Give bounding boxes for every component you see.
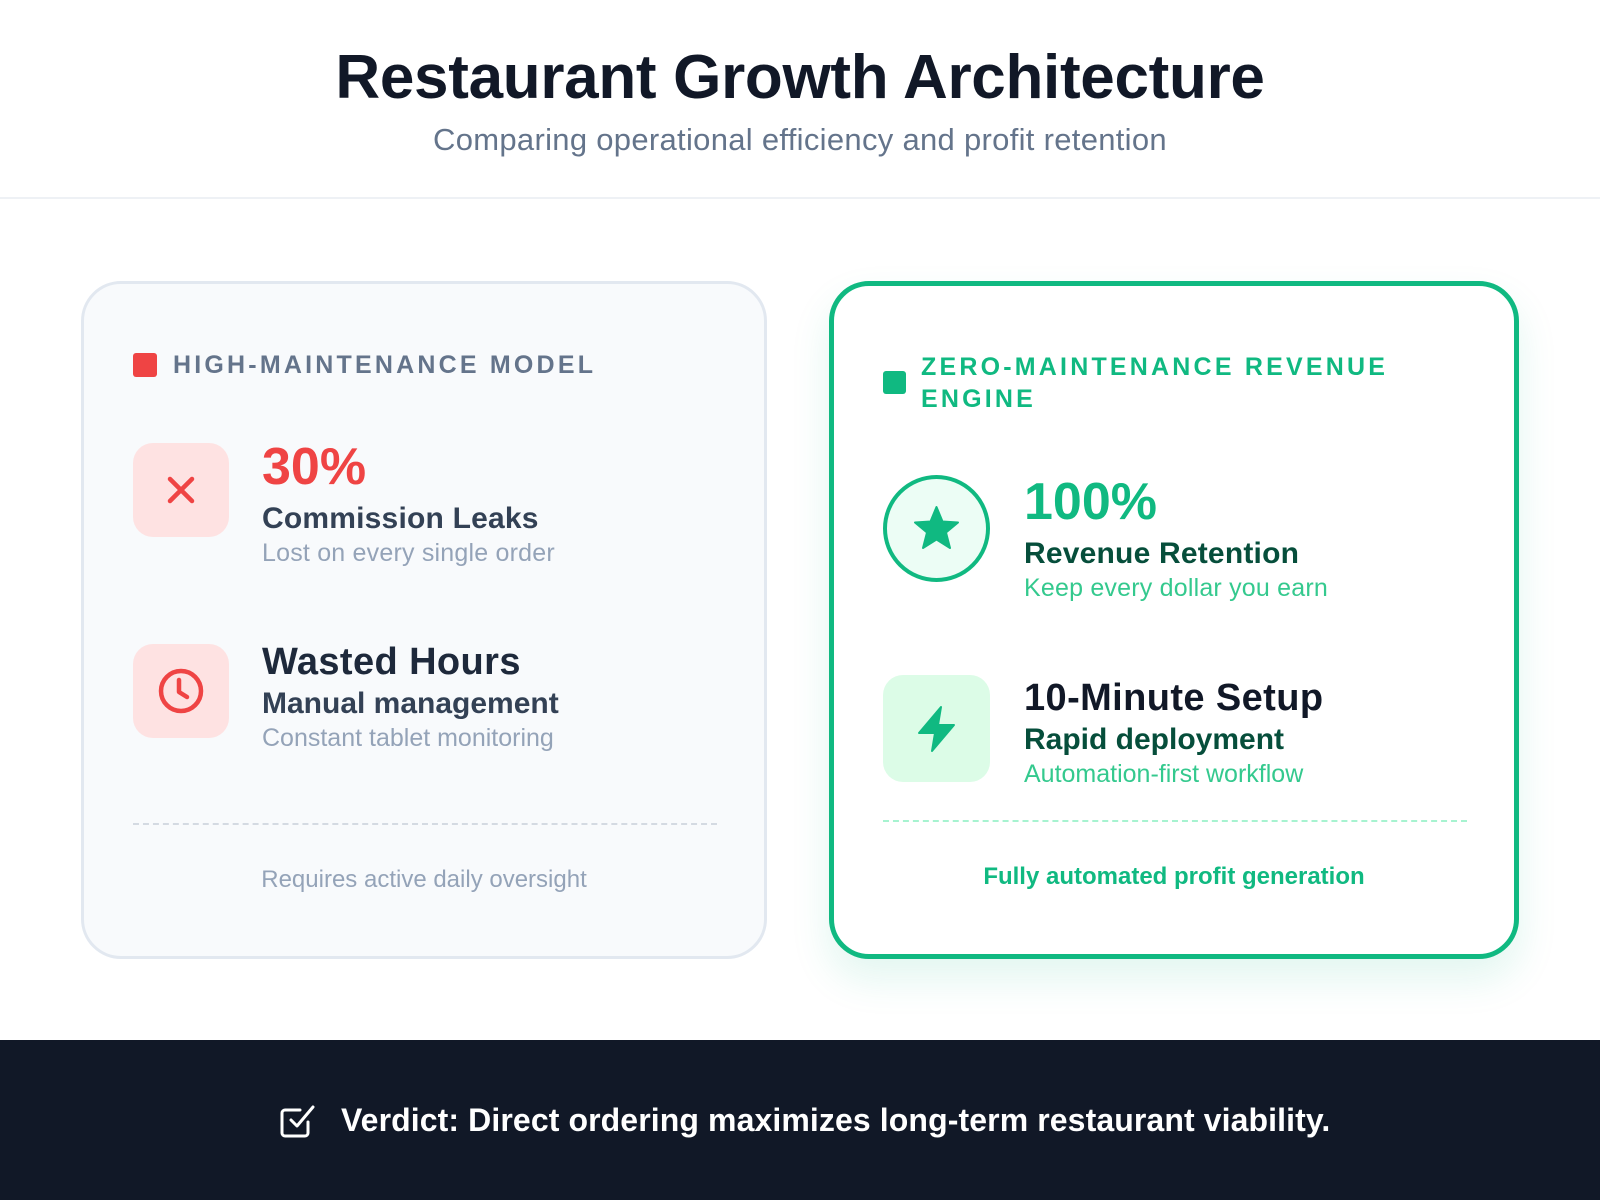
title: Restaurant Growth Architecture: [335, 43, 1265, 112]
footnote: Fully automated profit generation: [983, 863, 1365, 890]
stat: wasted hours: Wasted Hours: [262, 641, 521, 683]
icon: check box: [280, 1105, 315, 1138]
panel: zero-maintenance revenue engine: [829, 281, 1519, 959]
stat: revenue retention: Revenue Retention: [1024, 537, 1299, 570]
stat: 10-minute setup: 10-Minute Setup: [1024, 677, 1323, 719]
verdict text: Verdict: Direct ordering maximizes long-term restaurant viability.: [341, 1102, 1330, 1138]
icon: lightning bolt: [883, 675, 990, 782]
stat: revenue retention: [1024, 473, 1328, 602]
stat: revenue retention: 100%: [1024, 473, 1157, 531]
stat: 10-minute setup: Rapid deployment: [1024, 723, 1284, 756]
stat: revenue retention: Keep every dollar you earn: [1024, 574, 1328, 602]
stat: 10-minute setup: [1024, 677, 1323, 788]
footnote: Requires active daily oversight: [261, 866, 587, 893]
panel label: [133, 351, 596, 379]
panel: high-maintenance model: HIGH-MAINTENANCE MODEL: [173, 351, 596, 379]
panel label: ZERO-MAINTENANCE REVENUE ENGINE: [921, 353, 1388, 413]
footer verdict bar: [0, 1040, 1600, 1200]
panel: high-maintenance model: [81, 281, 767, 959]
stat: 10-minute setup: Automation-first workflow: [1024, 760, 1303, 788]
icon: star: [883, 475, 990, 582]
stat: commission leaks: Lost on every single order: [262, 539, 555, 567]
icon: x mark: [133, 443, 229, 537]
stat: commission leaks: Commission Leaks: [262, 502, 539, 535]
stat: commission leaks: 30%: [262, 438, 366, 496]
icon: clock: [133, 644, 229, 738]
subtitle: Comparing operational efficiency and profit retention: [433, 122, 1167, 157]
stat: wasted hours: Constant tablet monitoring: [262, 724, 554, 752]
stat: wasted hours: Manual management: [262, 687, 559, 720]
stat: commission leaks: [262, 438, 555, 567]
header: [0, 0, 1600, 199]
stat: wasted hours: [262, 641, 559, 752]
